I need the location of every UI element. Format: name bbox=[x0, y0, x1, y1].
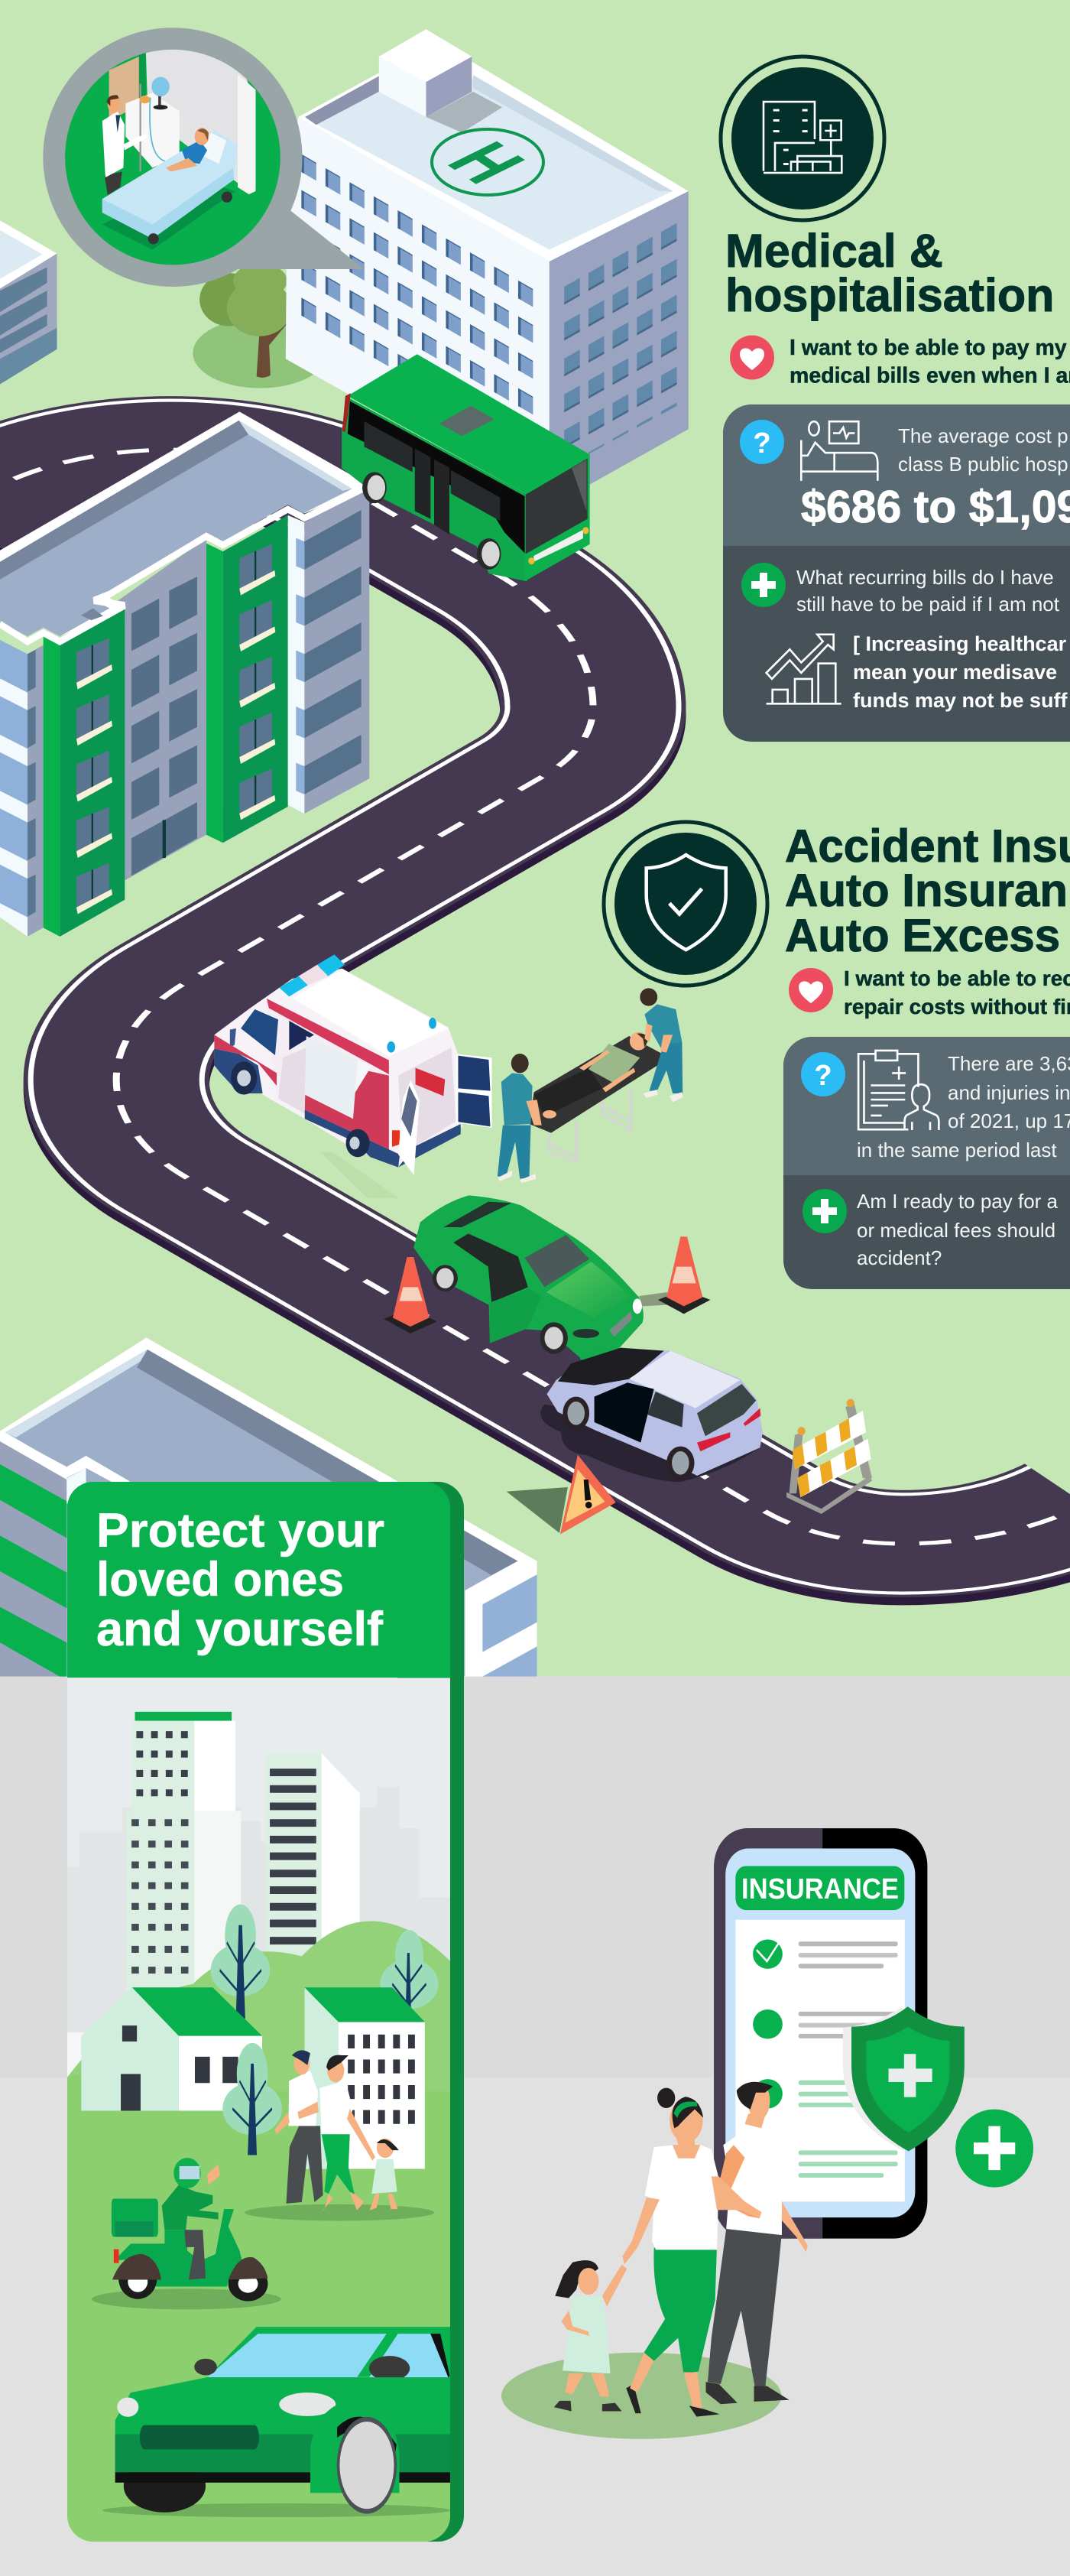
delivery rider on scooter bbox=[92, 2158, 281, 2309]
heading: accident and auto insurance: Auto Insuran bbox=[785, 865, 1068, 916]
paramedic back bbox=[640, 988, 683, 1103]
man bbox=[706, 2082, 808, 2404]
paramedic front bbox=[498, 1054, 542, 1183]
icon: question: ? bbox=[814, 1060, 832, 1092]
plus badge bbox=[955, 2110, 1033, 2188]
panel: road accident statistics bbox=[783, 1037, 1070, 1289]
goal statement: I want to be able to rec bbox=[844, 966, 1070, 990]
traffic cone left bbox=[384, 1257, 437, 1333]
house bbox=[81, 1987, 262, 2110]
tower left bbox=[126, 1712, 241, 1994]
icon: question bbox=[740, 420, 784, 464]
heading: medical and hospitalisation: Medical & bbox=[725, 225, 943, 277]
list item bbox=[799, 2150, 898, 2178]
readiness question: or medical fees should bbox=[857, 1219, 1055, 1242]
woman bbox=[622, 2088, 761, 2417]
shield badge bbox=[843, 2006, 965, 2151]
ambulance scene bbox=[214, 954, 683, 1198]
green panel left bbox=[44, 609, 125, 937]
tree back left bbox=[211, 1905, 270, 2019]
icon: heart bbox=[730, 335, 774, 379]
green car bbox=[102, 2327, 450, 2517]
heading: medical and hospitalisation: hospitalisation bbox=[725, 269, 1054, 321]
right wall bbox=[288, 486, 369, 814]
recurring bills question: still have to be paid if I am not bbox=[796, 593, 1060, 616]
background: green upper section bbox=[0, 0, 1070, 1677]
small building at left edge bbox=[0, 220, 57, 385]
winding road bbox=[0, 450, 1070, 1551]
middle grey wall with windows bbox=[112, 538, 206, 880]
rear red strip bbox=[342, 393, 351, 432]
sky bbox=[67, 1678, 450, 2551]
phone header label: INSURANCE bbox=[741, 1873, 899, 1905]
rear interior bbox=[398, 1048, 456, 1147]
room walls bbox=[146, 49, 249, 191]
skyline bbox=[67, 1787, 450, 2032]
goal statement: I want to be able to pay my bbox=[790, 336, 1067, 360]
list item check bbox=[753, 1939, 898, 1969]
crash scene bbox=[384, 1195, 872, 1535]
front apartment building bbox=[0, 411, 369, 937]
warning triangle bbox=[507, 1455, 616, 1535]
ambulance bbox=[214, 954, 492, 1175]
family walking bbox=[245, 2050, 434, 2220]
panel: hospital costs bbox=[723, 404, 1070, 742]
healthcare note: funds may not be suff bbox=[853, 689, 1068, 712]
hospital scene bbox=[0, 29, 689, 507]
left face bbox=[0, 640, 44, 937]
healthcare note: mean your medisave bbox=[853, 661, 1057, 684]
headlight strip bbox=[533, 530, 583, 562]
windshield bbox=[526, 458, 588, 554]
stretcher and patient bbox=[529, 1032, 670, 1162]
phone bbox=[714, 1828, 927, 2239]
healthcare note: [ Increasing healthcar bbox=[853, 632, 1067, 655]
green car bbox=[413, 1195, 644, 1360]
tree back right bbox=[380, 1930, 439, 2016]
roof light bar bbox=[279, 976, 308, 996]
hills bbox=[67, 1921, 450, 2551]
card header bbox=[67, 1482, 450, 1678]
card heading bbox=[96, 1504, 384, 1656]
readiness question: Am I ready to pay for a bbox=[857, 1190, 1059, 1213]
icon: shield with tick bbox=[604, 822, 767, 986]
accident section bbox=[604, 820, 1070, 1289]
list item bbox=[753, 2079, 898, 2109]
card illustration bbox=[67, 1678, 450, 2551]
statistics text: and injuries in bbox=[948, 1081, 1070, 1104]
apartment block bbox=[305, 1987, 425, 2169]
cabinet bbox=[125, 93, 180, 167]
IV stand bbox=[139, 84, 141, 171]
building behind the card bbox=[0, 1337, 537, 1677]
traffic cone right bbox=[639, 1236, 710, 1314]
list item bbox=[753, 2009, 898, 2038]
tower right bbox=[266, 1753, 360, 1961]
statistics text: in the same period last bbox=[857, 1139, 1057, 1161]
icon: plus bbox=[802, 1189, 847, 1233]
wheels bbox=[362, 472, 387, 503]
tree front bbox=[222, 2043, 282, 2155]
girl bbox=[554, 2260, 627, 2412]
card heading: loved ones bbox=[96, 1553, 344, 1606]
silver car bbox=[547, 1348, 763, 1480]
tree bbox=[193, 263, 327, 388]
skylight bbox=[439, 406, 494, 436]
card heading: Protect your bbox=[96, 1504, 384, 1558]
bed and patient bbox=[102, 128, 238, 250]
silver car shadow bbox=[540, 1405, 760, 1482]
icon: clipboard and person bbox=[858, 1051, 939, 1130]
hospital building bbox=[286, 29, 689, 507]
icon: question bbox=[801, 1052, 845, 1096]
cost text: class B public hosp bbox=[898, 453, 1068, 476]
ambulance shadow bbox=[320, 1152, 398, 1198]
icon: rising chart bbox=[767, 635, 841, 703]
road barricade bbox=[786, 1399, 872, 1514]
heading: accident and auto insurance: Auto Excess bbox=[785, 910, 1060, 961]
icon: question: ? bbox=[753, 427, 771, 460]
lamp bbox=[158, 96, 161, 106]
recurring bills question: What recurring bills do I have bbox=[796, 566, 1054, 589]
doctor bbox=[102, 95, 141, 195]
icon: hospital bbox=[721, 57, 884, 220]
cost text: The average cost p bbox=[898, 424, 1068, 447]
roof bbox=[0, 411, 369, 642]
green bus bbox=[342, 354, 590, 581]
green panel right bbox=[206, 515, 288, 843]
icon: heart bbox=[789, 968, 833, 1012]
helipad H marking: H bbox=[429, 132, 543, 194]
insurance phone illustration bbox=[501, 1828, 1033, 2439]
callout bubble with hospital room bbox=[43, 28, 364, 287]
ground ellipse bbox=[501, 2353, 781, 2439]
readiness question: accident? bbox=[857, 1246, 942, 1269]
card: protect your loved ones bbox=[67, 1482, 464, 2551]
background: grey lower section bbox=[0, 1676, 1070, 2576]
side windows bbox=[348, 401, 525, 553]
card heading: and yourself bbox=[96, 1603, 384, 1656]
medical section bbox=[721, 57, 1070, 742]
insurance header bbox=[735, 1866, 904, 1910]
icon: hospital bed bbox=[801, 421, 877, 481]
rooftop plant box bbox=[379, 29, 502, 132]
icon: plus bbox=[741, 563, 786, 607]
